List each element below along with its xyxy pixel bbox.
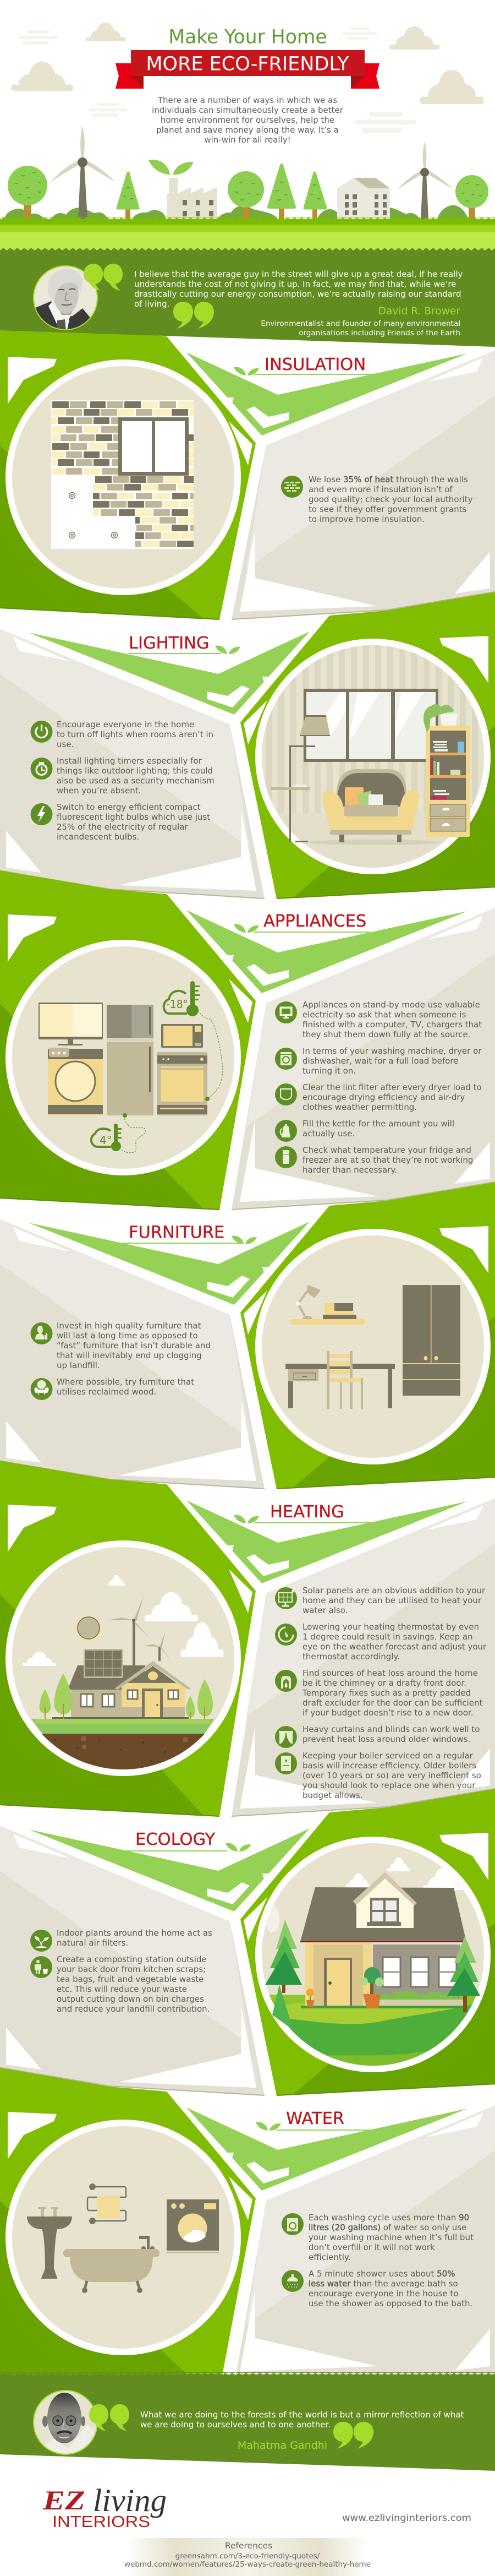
panel: heating — [0, 1461, 495, 1817]
sprouting leaves — [148, 160, 194, 175]
triangle tree — [118, 173, 138, 219]
references: greensahm.com/3-eco-friendly-quotes/ — [175, 2552, 320, 2561]
text: appliances tip 4 — [302, 1119, 454, 1139]
heading: heating: HEATING — [270, 1502, 344, 1522]
icon: shower — [282, 2270, 304, 2292]
text: heating tip 2: Lowering your heating thermostat by even — [302, 1622, 479, 1632]
microwave — [161, 1024, 203, 1048]
heading: appliances — [234, 912, 370, 933]
icon: power — [31, 721, 53, 743]
desk — [285, 1364, 395, 1408]
text: water tip 2: A 5 minute shower uses about 50% — [309, 2269, 455, 2279]
fridge freezer — [107, 1005, 153, 1115]
round tree right — [455, 175, 488, 219]
panel: lighting — [0, 592, 495, 899]
text: insulation tip — [309, 475, 473, 524]
panel: insulation — [0, 313, 495, 620]
text: lighting tip 2 — [57, 756, 215, 796]
heading: lighting — [129, 634, 240, 654]
text: appliances tip 3: clothes weather permitting. — [302, 1102, 417, 1112]
text: water tip 2: less water than the average bath so — [309, 2279, 458, 2289]
text: heating tip 5: you should look to replace one when your — [302, 1780, 476, 1790]
ground and soil — [42, 1734, 205, 1769]
text: lighting tip 3: 25% of the electricity of regular — [57, 822, 188, 832]
text: furniture tip 1: up landfill. — [57, 1360, 100, 1370]
illustration: house and garden — [248, 1837, 491, 2076]
text: furniture tip 1: will last a long time as opposed to — [57, 1331, 198, 1341]
icon: fireplace — [275, 1670, 297, 1692]
text: lighting tip 1 — [57, 720, 213, 749]
text: appliances tip 2: dishwasher, wait for a full load before — [302, 1056, 458, 1066]
text: appliances tip 5: freezer are at so that they’re not working — [302, 1155, 473, 1165]
icon: stopwatch — [31, 758, 53, 780]
illustration: living room — [255, 639, 491, 874]
text: lighting tip 2: things like outdoor lighting; this could — [57, 766, 213, 776]
text: water tip 1: Each washing cycle uses more than 90 — [309, 2213, 469, 2223]
text: appliances tip 4: Fill the kettle for the amount you will — [302, 1119, 454, 1129]
icon: washing machine — [275, 1048, 297, 1070]
portrait: Brower — [33, 266, 97, 331]
red ribbon banner — [116, 50, 380, 89]
quote text — [134, 269, 463, 309]
text: ecology tip 2: your back door from kitchen scraps; — [57, 1964, 206, 1974]
text: furniture tip 1 — [57, 1321, 211, 1370]
text: heating tip 2 — [302, 1622, 487, 1662]
text: heating tip 3: draft excluder for the door can be sufficient — [302, 1698, 483, 1708]
intro text: planet and save money along the way. It’s a — [156, 125, 339, 135]
text: insulation tip: We lose 35% of heat through the walls — [309, 475, 468, 484]
illustration: bathroom — [6, 2120, 241, 2355]
text: heating tip 3: be it the chimney or a drafty front door. — [302, 1678, 466, 1688]
text: furniture tip 1: “fast” furniture that isn’t durable and — [57, 1341, 211, 1350]
text: lighting tip 2: Install lighting timers especially for — [57, 756, 202, 766]
landscape: bushes, trees, wind turbines, factory, house — [4, 126, 488, 219]
text: furniture tip 1: Invest in high quality furniture that — [57, 1321, 201, 1331]
text: appliances tip 1: Appliances on stand-by mode use valuable — [302, 1000, 480, 1010]
panel: water — [0, 2068, 495, 2378]
text: lighting tip 1: use. — [57, 739, 74, 749]
attribution: David R. Brower — [378, 306, 460, 317]
text: appliances tip 2: In terms of your washing machine, dryer or — [302, 1046, 482, 1056]
text: lighting tip 2: when you’re absent. — [57, 786, 141, 796]
text: heating tip 5: Keeping your boiler serviced on a regular — [302, 1751, 474, 1761]
text: ecology tip 2: etc. This will reduce your waste — [57, 1984, 187, 1994]
text: appliances tip 3: Clear the lint filter after every dryer load to — [302, 1082, 482, 1092]
text: ecology tip 2: and reduce your landfill contribution. — [57, 2004, 210, 2014]
logo: EZ living interiors: INTERIORS — [52, 2513, 150, 2531]
text: heating tip 3: if your budget doesn’t rise to a new door. — [302, 1708, 473, 1718]
text: appliances tip 5: Check what temperature your fridge and — [302, 1145, 471, 1155]
illustration: desk, chair and wardrobe — [255, 1229, 491, 1464]
text: appliances tip 3: encourage drying efficiency and air-dry — [302, 1092, 465, 1102]
cooker — [157, 1052, 207, 1115]
books — [323, 1303, 356, 1319]
trees — [40, 1674, 213, 1718]
potted plants — [306, 1967, 384, 2008]
washing machine — [167, 2199, 219, 2253]
panel: appliances — [0, 870, 495, 1210]
thermometer: fridge: 4° — [100, 1134, 112, 1147]
quote marks open — [84, 264, 123, 291]
conifer left — [265, 1920, 302, 2030]
heading: ecology: ECOLOGY — [135, 1830, 216, 1849]
text: lighting tip 1: Encourage everyone in the home — [57, 720, 194, 729]
quote band: David R. Brower — [0, 248, 495, 347]
quote text: What we are doing to the forests of the world is but a mirror reflection of what — [140, 2410, 464, 2420]
text: water tip 1: your washing machine when it’s full but — [309, 2232, 474, 2242]
text: heating tip 3: Temporary fixes such as a pretty padded — [302, 1688, 471, 1698]
text: ecology tip 2 — [57, 1954, 210, 2014]
text: lighting tip 3: fluorescent light bulbs which use just — [57, 812, 210, 822]
text: heating tip 1 — [302, 1586, 486, 1615]
text: furniture tip 2: Where possible, try furniture that — [57, 1377, 194, 1387]
quote marks close — [173, 302, 214, 329]
text: ecology tip 2: output cutting down on bin charges — [57, 1994, 204, 2004]
text: appliances tip 1: they shut them down fully at the source. — [302, 1030, 471, 1039]
house — [337, 178, 390, 219]
text: heating tip 3 — [302, 1668, 483, 1718]
icon: person and bin — [30, 1956, 52, 1978]
text: insulation tip: good quality; check your local authority — [309, 494, 473, 504]
illustration: kitchen appliances — [6, 940, 241, 1175]
intro text — [152, 95, 344, 145]
chair — [327, 1351, 363, 1409]
text: water tip 1: efficiently. — [309, 2252, 350, 2262]
washing machine — [48, 1048, 103, 1115]
quote text: understands the cost of not giving it up. In fact, we may find that, while we’re — [134, 279, 456, 289]
intro text: home environment for ourselves, help the — [161, 115, 334, 125]
text: appliances tip 1: finished with a computer, TV, chargers that — [302, 1020, 482, 1030]
text: water tip 2 — [309, 2269, 472, 2308]
text: furniture tip 2: utilises reclaimed wood. — [57, 1387, 156, 1397]
icon: boiler — [275, 1752, 297, 1774]
illustration: eco house with solar panels — [6, 1540, 241, 1776]
house — [52, 1649, 191, 1719]
text: lighting tip 2: also be used as a security mechanism — [57, 776, 215, 786]
text: insulation tip: to improve home insulation. — [309, 514, 425, 524]
text: heating tip 5: basis will increase efficiency. Older boilers — [302, 1761, 476, 1771]
text: heating tip 5: (over 10 years or so) are very inefficient so — [302, 1771, 481, 1780]
text: appliances tip 2 — [302, 1046, 482, 1076]
red ribbon banner: MORE ECO-FRIENDLY — [146, 53, 349, 75]
text: lighting tip 1: to turn off lights when rooms aren’t in — [57, 729, 213, 739]
intro text: win-win for all really! — [204, 135, 291, 145]
icon: washing machine — [282, 2213, 304, 2235]
icon: solar panel — [275, 1587, 297, 1609]
text: lighting tip 3 — [57, 802, 210, 842]
house body — [300, 1872, 466, 2008]
logo: EZ living interiors: living — [93, 2482, 167, 2518]
text: heating tip 2: thermostat accordingly. — [302, 1652, 400, 1662]
text: heating tip 1: water also. — [302, 1605, 348, 1615]
text: water tip 2: encourage everyone in the house to — [309, 2289, 459, 2299]
text: furniture tip 1: that will inevitably end up clogging — [57, 1350, 202, 1360]
logo: EZ living interiors: EZ — [42, 2485, 85, 2515]
attribution: organisations including Friends of the Earth — [299, 329, 460, 337]
icon: curtains — [275, 1726, 297, 1748]
title: Make Your Home — [168, 26, 327, 48]
armchair — [323, 769, 419, 842]
heading: furniture: FURNITURE — [129, 1223, 224, 1242]
text: heating tip 2: 1 degree could result in savings. Keep an — [302, 1632, 473, 1642]
text: heating tip 3: Find sources of heat loss around the home — [302, 1668, 478, 1678]
text: water tip 2: use the shower as opposed to the bath. — [309, 2299, 472, 2308]
wind turbine right — [397, 141, 453, 219]
round tree left — [8, 166, 47, 219]
text: appliances tip 5: harder than necessary. — [302, 1165, 397, 1175]
quote band: Mahatma Gandhi — [0, 2372, 495, 2471]
icon: kettle — [275, 1120, 297, 1142]
bookcase and plant — [424, 704, 470, 837]
intro text: individuals can simultaneously create a better — [152, 105, 344, 115]
quote marks close — [333, 2422, 373, 2449]
thermometer: freezer — [164, 981, 223, 1101]
heading: appliances: APPLIANCES — [263, 912, 366, 931]
portrait: Gandhi — [34, 2390, 98, 2455]
website url: www.ezlivinginteriors.com — [342, 2513, 471, 2524]
triangle trees — [269, 165, 326, 219]
intro text: There are a number of ways in which we as — [157, 95, 337, 105]
thermometer: fridge — [91, 1113, 145, 1153]
references: webmd.com/women/features/25-ways-create-green-healthy-home — [124, 2560, 371, 2569]
heading: insulation — [234, 355, 374, 375]
icon: thermostat — [275, 1624, 297, 1646]
text: appliances tip 4: actually use. — [302, 1129, 355, 1139]
icon: monitor — [275, 1001, 297, 1023]
television — [38, 1003, 103, 1045]
desk lamp — [296, 1285, 321, 1319]
text: heating tip 4: Heavy curtains and blinds can work well to — [302, 1724, 480, 1734]
quote marks open — [89, 2404, 129, 2431]
icon: fridge — [275, 1146, 297, 1168]
ground stripes — [0, 217, 495, 251]
text: appliances tip 2: turning it on. — [302, 1066, 356, 1076]
floor lamp — [271, 715, 330, 842]
text: ecology tip 1: Indoor plants around the home act as — [57, 1928, 212, 1938]
heading: lighting: LIGHTING — [129, 634, 210, 653]
towel rail — [87, 2183, 126, 2224]
text: appliances tip 5 — [302, 1145, 473, 1175]
text: furniture tip 2 — [57, 1377, 194, 1397]
heading: heating — [234, 1502, 374, 1523]
icon: armchair — [31, 1378, 53, 1400]
attribution — [261, 306, 460, 337]
quote text: drastically cutting our energy consumption, we’re actually raising our standard — [134, 289, 461, 299]
shelf top — [290, 1319, 365, 1325]
text: lighting tip 3: Switch to energy efficient compact — [57, 802, 201, 812]
wind turbine left — [50, 126, 116, 219]
round tree middle — [228, 171, 264, 219]
panel: furniture — [0, 1182, 495, 1489]
text: heating tip 5 — [302, 1751, 481, 1800]
text: ecology tip 2: tea bags, fruit and vegetable waste — [57, 1974, 204, 1984]
panel: ecology — [0, 1789, 495, 2096]
heading: furniture — [122, 1223, 257, 1244]
sky: clouds and sun — [23, 1575, 223, 1666]
factory — [167, 178, 217, 219]
text: appliances tip 3 — [302, 1082, 482, 1112]
icon: lightning bolt — [31, 803, 53, 825]
icon: bricks — [281, 476, 303, 498]
header clouds — [11, 23, 484, 133]
text: ecology tip 2: Create a composting station outside — [57, 1954, 207, 1964]
wardrobe — [403, 1285, 460, 1396]
text: insulation tip: and even more if insulation isn’t of — [309, 484, 453, 494]
text: heating tip 4 — [302, 1724, 480, 1744]
text: heating tip 2: eye on the weather forecast and adjust your — [302, 1642, 487, 1652]
text: appliances tip 1 — [302, 1000, 482, 1039]
icon: sprout — [30, 1930, 52, 1952]
bath tub — [63, 2236, 160, 2293]
quote text: I believe that the average guy in the street will give up a great deal, if he really — [134, 269, 463, 279]
text: water tip 1: litres (20 gallons) of water so only use — [309, 2223, 466, 2232]
logo: EZ living interiors — [42, 2482, 167, 2531]
heading: water: WATER — [286, 2109, 344, 2128]
text: ecology tip 1 — [57, 1928, 212, 1948]
illustration: circle frame — [6, 360, 241, 595]
text: heating tip 4: prevent heat loss around older windows. — [302, 1734, 470, 1744]
text: water tip 1 — [309, 2213, 474, 2262]
icon: person and chart — [31, 1322, 53, 1344]
text: insulation tip: to see if they offer government grants — [309, 504, 466, 514]
heading: water — [256, 2109, 374, 2131]
basin — [27, 2207, 72, 2279]
attribution: Mahatma Gandhi — [238, 2439, 327, 2452]
text: heating tip 1: Solar panels are an obvious addition to your — [302, 1586, 486, 1595]
quote text: of living. — [134, 299, 169, 309]
thermometer: freezer: -18° — [166, 998, 188, 1011]
references: References — [225, 2541, 272, 2551]
wind turbines — [107, 1596, 170, 1665]
heading: insulation: INSULATION — [265, 355, 366, 374]
text: appliances tip 1: electricity so ask that when someone is — [302, 1010, 466, 1020]
text: ecology tip 1: natural air filters. — [57, 1938, 128, 1948]
heading: ecology — [122, 1830, 251, 1851]
icon: lint filter — [275, 1083, 297, 1105]
illustration: brick wall and window — [51, 400, 194, 549]
quote text — [140, 2410, 464, 2430]
quote text: we are doing to ourselves and to one another. — [140, 2420, 331, 2430]
references — [124, 2538, 371, 2576]
conifer right — [447, 1936, 480, 2012]
text: heating tip 5: budget allows. — [302, 1790, 363, 1800]
text: heating tip 1: home and they can be utilised to heat your — [302, 1595, 482, 1605]
text: water tip 1: don’t overfill or it will not work — [309, 2242, 435, 2252]
attribution: Environmentalist and founder of many environmental — [261, 319, 460, 328]
text: lighting tip 3: incandescent bulbs. — [57, 832, 139, 842]
